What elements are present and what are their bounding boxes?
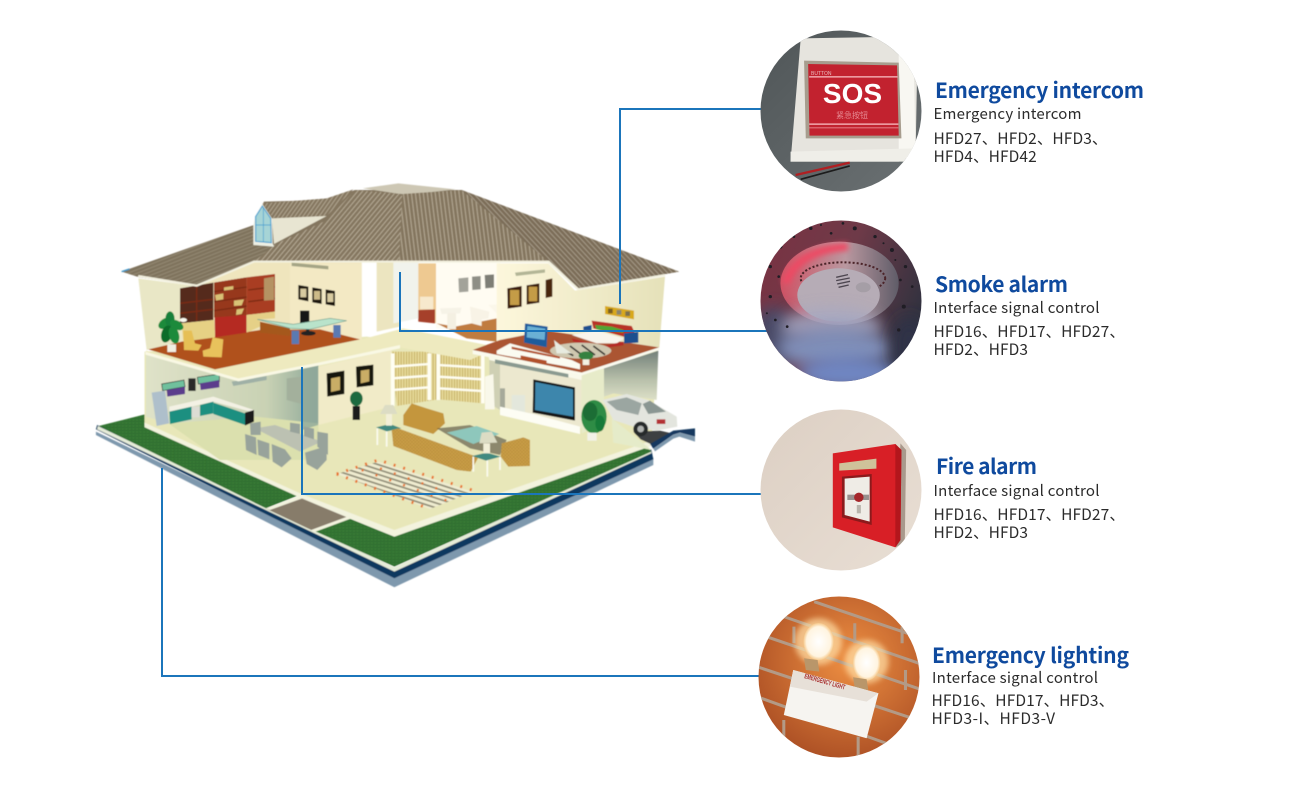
living room furniture and heating bbox=[245, 403, 530, 509]
centre wall, bookcases and living room floor bbox=[302, 350, 483, 430]
underfloor heating grid bbox=[337, 460, 474, 509]
heading: Smoke alarm bbox=[935, 269, 1068, 299]
heading: Emergency lighting bbox=[932, 640, 1129, 670]
models: HFD16、HFD17、HFD3、 bbox=[932, 689, 1114, 711]
models: HFD16、HFD17、HFD27、 bbox=[934, 320, 1125, 342]
lamp table right bbox=[472, 432, 501, 477]
photo: smoke detector bbox=[760, 220, 922, 382]
description: Interface signal control bbox=[934, 297, 1100, 318]
models: HFD4、HFD42 bbox=[934, 145, 1037, 167]
kitchen units bbox=[152, 374, 254, 426]
description: Interface signal control bbox=[932, 667, 1098, 688]
tv room, garage and car bbox=[485, 351, 695, 451]
potted plant bbox=[581, 400, 607, 441]
office desk bbox=[257, 311, 347, 344]
models bbox=[934, 503, 1125, 543]
plant bbox=[156, 311, 187, 352]
panel: fire alarm bbox=[760, 410, 1115, 570]
photo: manual call point bbox=[760, 410, 922, 570]
kitchen and dining room bbox=[146, 353, 320, 460]
media unit bbox=[497, 340, 580, 369]
car bbox=[603, 394, 677, 436]
rug and plant bbox=[550, 343, 611, 365]
study bbox=[148, 274, 360, 369]
connector: emergency lighting bbox=[162, 468, 767, 676]
roof dormer bbox=[253, 189, 353, 247]
roof bbox=[122, 183, 679, 289]
panel: emergency lighting bbox=[758, 596, 1129, 758]
models bbox=[934, 320, 1125, 360]
heading: Emergency intercom bbox=[935, 75, 1144, 105]
ground base, lawn and path bbox=[96, 337, 657, 587]
illustration: cutaway house bbox=[96, 183, 695, 587]
coffee table and rug bbox=[437, 425, 507, 455]
models: HFD3-I、HFD3-V bbox=[932, 707, 1056, 729]
photo: SOS button bbox=[760, 30, 922, 192]
models bbox=[932, 689, 1114, 729]
bookshelf bbox=[180, 274, 275, 342]
photo: SOS button: SOS bbox=[823, 78, 882, 109]
photo: emergency light on brick wall: EMERGENCY LIGHT bbox=[803, 673, 846, 692]
photo: SOS button: BUTTON bbox=[811, 71, 832, 77]
panel: smoke alarm bbox=[760, 220, 1115, 382]
dining set bbox=[245, 422, 328, 470]
connector: fire alarm bbox=[302, 367, 767, 494]
bed bbox=[572, 321, 638, 348]
photo: SOS button: 紧急按钮 bbox=[836, 110, 868, 121]
heading: Fire alarm bbox=[936, 451, 1037, 481]
upper floor slab bbox=[145, 328, 498, 381]
upper walls bbox=[138, 262, 362, 350]
description: Interface signal control bbox=[934, 480, 1100, 501]
yellow picture group bbox=[605, 306, 634, 319]
panel: emergency intercom bbox=[755, 25, 1144, 200]
models: HFD2、HFD3 bbox=[934, 338, 1028, 360]
models bbox=[934, 127, 1108, 167]
armchair bbox=[403, 403, 445, 434]
models: HFD16、HFD17、HFD27、 bbox=[934, 503, 1125, 525]
monitor bbox=[524, 323, 548, 347]
armchair right bbox=[501, 437, 530, 467]
chairs bbox=[183, 331, 223, 357]
lamp tables bbox=[376, 405, 401, 447]
models: HFD27、HFD2、HFD3、 bbox=[934, 127, 1108, 149]
connector: emergency intercom bbox=[620, 109, 767, 304]
bedroom bbox=[473, 321, 659, 380]
centre hall, bathroom and bedroom wall bbox=[377, 262, 665, 347]
picture frames bbox=[298, 285, 335, 306]
sofa bbox=[392, 428, 478, 472]
connector: smoke alarm bbox=[400, 272, 767, 331]
description: Emergency intercom bbox=[934, 103, 1082, 124]
photo: emergency light on brick wall bbox=[758, 596, 920, 758]
models: HFD2、HFD3 bbox=[934, 521, 1028, 543]
